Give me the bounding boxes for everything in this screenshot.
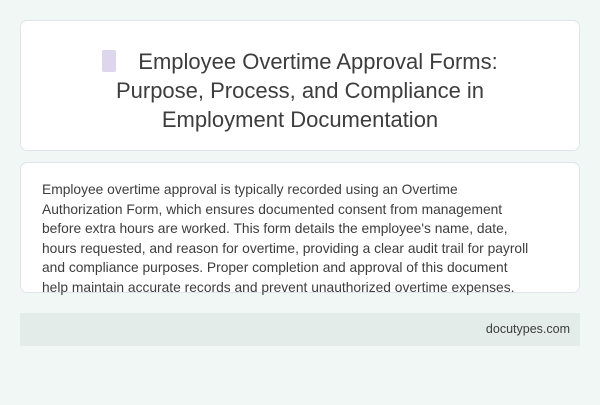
description text: before extra hours are worked. This form details the employee's name, date, (42, 221, 508, 236)
description text: help maintain accurate records and prevent unauthorized overtime expenses. (42, 280, 514, 294)
title: Purpose, Process, and Compliance in (116, 78, 484, 103)
description text: Employee overtime approval is typically recorded using an Overtime (42, 182, 458, 197)
title (102, 49, 498, 132)
description text: and compliance purposes. Proper completion and approval of this document (42, 260, 508, 275)
body text card (20, 162, 580, 293)
title: Employment Documentation (162, 107, 438, 132)
title: Employee Overtime Approval Forms: (138, 49, 498, 74)
footer source: docutypes.com (486, 322, 570, 336)
icon: document (102, 50, 116, 72)
description text: hours requested, and reason for overtime, providing a clear audit trail for payroll (42, 240, 528, 256)
footer (20, 313, 580, 346)
header card (20, 20, 580, 151)
description text (42, 182, 528, 295)
description text: Authorization Form, which ensures documented consent from management (42, 202, 502, 216)
